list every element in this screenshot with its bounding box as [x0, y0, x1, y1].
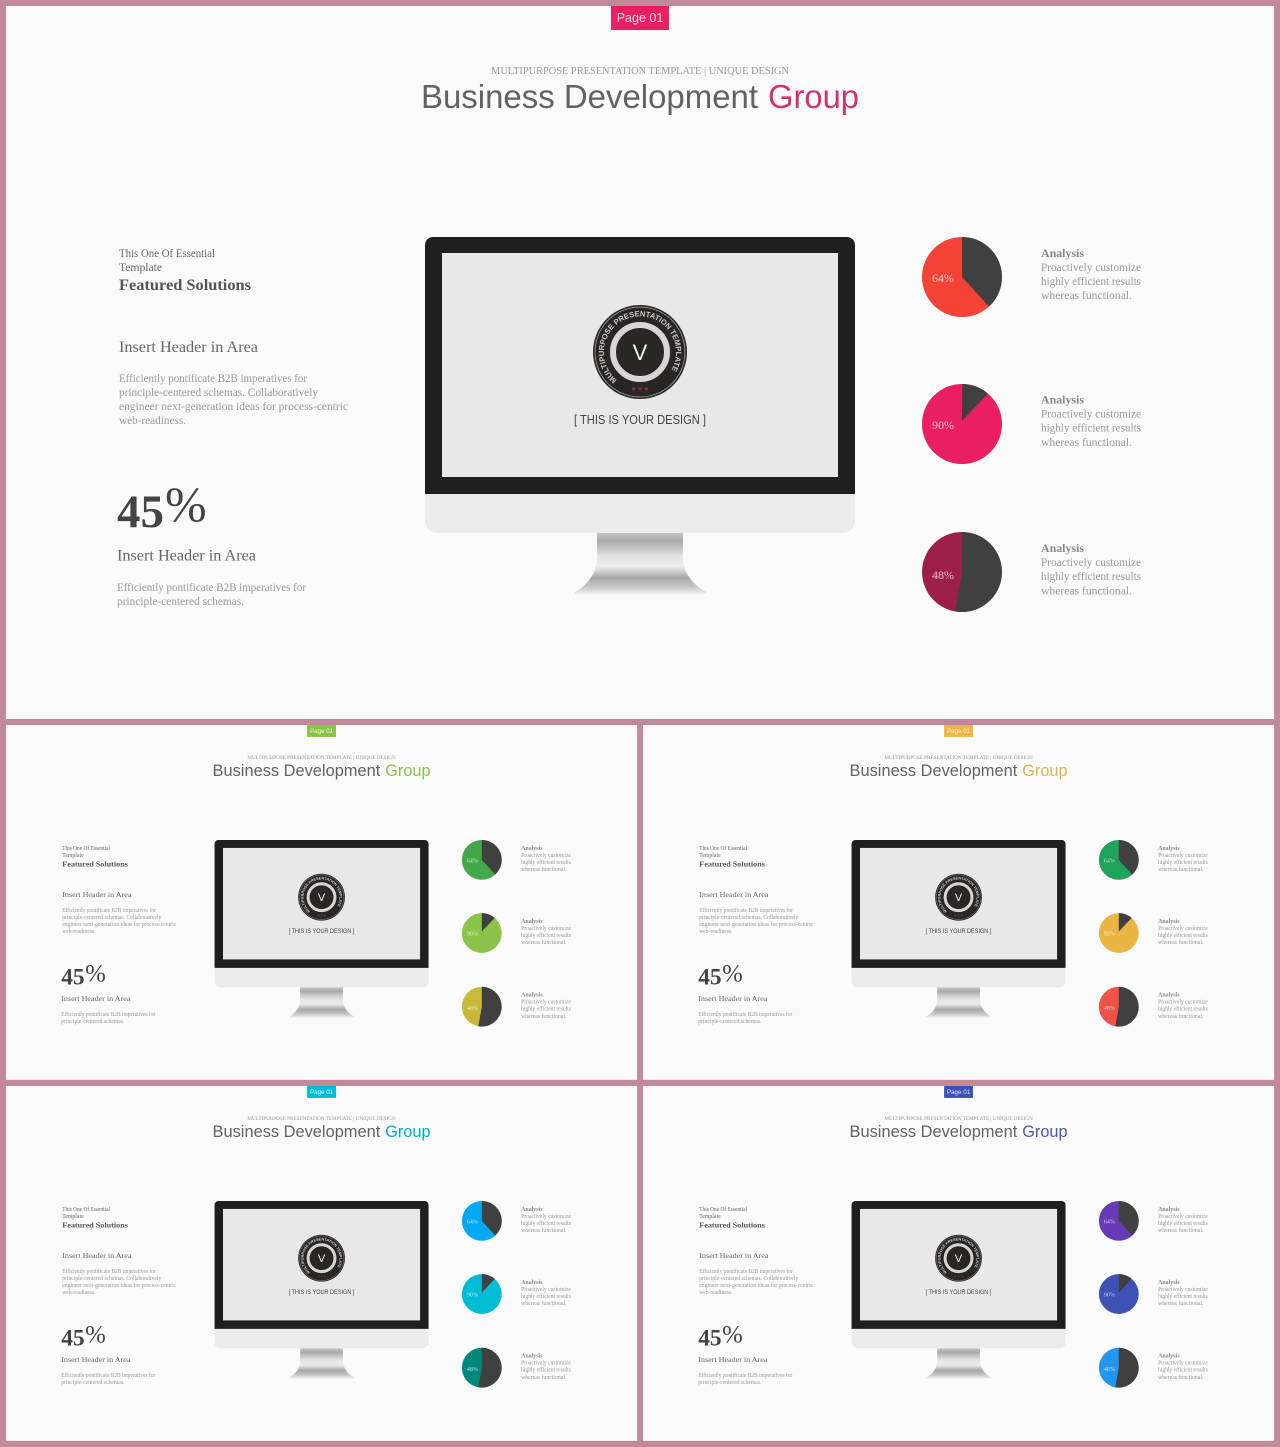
pie: 64% [462, 840, 502, 880]
screen caption: [ THIS IS YOUR DESIGN ] [289, 1289, 355, 1296]
logo badge: MULTIPURPOSE PRESENTATION TEMPLATE [598, 311, 682, 384]
analysis text two [521, 919, 572, 946]
analysis text three: whereas functional. [1041, 584, 1132, 598]
analysis text one: Proactively customize [1041, 261, 1141, 274]
analysis text two: whereas functional. [521, 1300, 567, 1307]
page badge [944, 725, 973, 737]
stat: 45%: % [722, 960, 743, 987]
monitor [214, 840, 429, 1018]
pie: 48% [462, 1348, 502, 1388]
text block: header one [62, 890, 177, 935]
monitor [214, 1201, 429, 1378]
left intro text: Template [62, 1214, 84, 1220]
text block: header one: engineer next-generation ideas for process-centric [119, 400, 348, 413]
stat: 45%: % [165, 476, 207, 532]
logo badge: ★★★ [954, 914, 963, 918]
left intro text [699, 1206, 765, 1229]
text block: header one: Efficiently pontificate B2B imperatives for [62, 907, 156, 914]
pie: 48% [922, 532, 1002, 612]
text block: header one: principle-centered schemas. Collaboratively [699, 915, 798, 921]
analysis text one: highly efficient results [1041, 275, 1141, 288]
text block: header two [698, 994, 792, 1025]
analysis text one: whereas functional. [1158, 1227, 1204, 1234]
pie: 48%: 48% [1104, 1367, 1115, 1373]
left intro text: Featured Solutions [699, 1220, 765, 1229]
text block: header two [61, 994, 155, 1025]
analysis text one: Proactively customize [1158, 853, 1208, 859]
logo badge: V [633, 340, 648, 365]
pie: 48%: 48% [467, 1006, 478, 1012]
analysis text two: Analysis [1158, 919, 1180, 925]
analysis text two [1158, 1280, 1209, 1307]
analysis text three: highly efficient results [1041, 570, 1141, 583]
logo badge: MULTIPURPOSE PRESENTATION TEMPLATE [300, 1238, 342, 1274]
title: Group [1022, 762, 1068, 780]
analysis text one: Proactively customize [521, 1214, 571, 1220]
left intro text [62, 1206, 128, 1229]
logo badge [935, 874, 982, 921]
analysis text three: Proactively customize [521, 1361, 571, 1367]
analysis text two: whereas functional. [1158, 939, 1204, 946]
logo badge: ★★★ [317, 1275, 326, 1279]
pie: 64%: 64% [1104, 858, 1115, 864]
analysis text one [1158, 1207, 1209, 1234]
panel: main slide, pink theme [6, 6, 1274, 719]
stat: 45%: 45 [698, 1325, 722, 1351]
analysis text two: Proactively customize [521, 926, 571, 932]
pie: 48%: 48% [467, 1367, 478, 1373]
stat: 45% [698, 960, 743, 990]
left intro text: This One Of Essential [62, 1206, 110, 1213]
pie: 64% [462, 1201, 502, 1241]
text block: header two [117, 548, 306, 608]
pie: 48% [462, 987, 502, 1027]
analysis text one: highly efficient results [1158, 859, 1209, 866]
analysis text three: highly efficient results [1158, 1367, 1209, 1374]
text block: header one: web-readiness. [62, 1290, 96, 1296]
text block: header one: web-readiness. [62, 929, 96, 935]
title: Business Development [213, 1123, 381, 1141]
page badge: Page 01 [310, 728, 334, 735]
logo badge: V [318, 892, 326, 904]
analysis text three: Analysis [1158, 993, 1180, 999]
analysis text three: Analysis [1041, 542, 1084, 555]
subtitle: MULTIPURPOSE PRESENTATION TEMPLATE | UNIQUE DESIGN [884, 1116, 1033, 1122]
analysis text two: whereas functional. [521, 939, 567, 946]
analysis text two: whereas functional. [1041, 436, 1132, 449]
text block: header one: Efficiently pontificate B2B imperatives for [699, 907, 793, 914]
analysis text two: Proactively customize [1158, 1287, 1208, 1293]
pie: 48% [1099, 987, 1139, 1027]
analysis text two: whereas functional. [1158, 1300, 1204, 1307]
subtitle: MULTIPURPOSE PRESENTATION TEMPLATE | UNIQUE DESIGN [491, 66, 789, 77]
analysis text three: whereas functional. [521, 1013, 567, 1020]
text block: header two: Efficiently pontificate B2B imperatives for [61, 1372, 155, 1379]
text block: header one: web-readiness. [699, 1290, 733, 1296]
analysis text two: Proactively customize [1158, 926, 1208, 932]
monitor [852, 1201, 1066, 1378]
text block: header one: principle-centered schemas. Collaboratively [62, 1276, 161, 1282]
logo badge [298, 874, 345, 921]
analysis text one: Proactively customize [521, 853, 571, 859]
analysis text two: highly efficient results [1158, 932, 1209, 939]
analysis text three: whereas functional. [521, 1374, 567, 1381]
analysis text one: highly efficient results [1158, 1220, 1209, 1227]
text block: header two [698, 1355, 792, 1386]
analysis text one: highly efficient results [521, 859, 572, 866]
panel: small slide, amber theme [643, 725, 1274, 1080]
subtitle: MULTIPURPOSE PRESENTATION TEMPLATE | UNIQUE DESIGN [247, 1116, 396, 1122]
text block: header one: Insert Header in Area [62, 890, 132, 899]
analysis text one: Proactively customize [1158, 1214, 1208, 1220]
text block: header two: principle-centered schemas. [61, 1019, 125, 1025]
page badge [611, 6, 669, 30]
screen caption: [ THIS IS YOUR DESIGN ] [926, 1289, 992, 1296]
text block: header one: engineer next-generation ideas for process-centric [699, 1282, 814, 1289]
analysis text three: Proactively customize [1041, 556, 1141, 569]
analysis text one: Analysis [1158, 1207, 1180, 1213]
text block: header one [699, 890, 814, 935]
text block: header one: engineer next-generation ideas for process-centric [62, 1282, 177, 1289]
analysis text two: highly efficient results [1041, 422, 1141, 434]
left intro text: This One Of Essential [119, 247, 215, 260]
analysis text three [1158, 993, 1209, 1020]
pie: 90%: 90% [1104, 1293, 1115, 1299]
analysis text one: Analysis [1158, 846, 1180, 852]
text block: header one: Insert Header in Area [119, 339, 258, 356]
left intro text [699, 845, 765, 868]
analysis text three [521, 1354, 572, 1381]
left intro text: Featured Solutions [62, 1220, 128, 1229]
pie: 48%: 48% [1104, 1006, 1115, 1012]
analysis text three: Analysis [1158, 1354, 1180, 1360]
panel: small slide, cyan theme [6, 1086, 638, 1441]
text block: header two: Insert Header in Area [698, 994, 768, 1003]
analysis text two: Analysis [521, 919, 543, 925]
analysis text three [1158, 1354, 1209, 1381]
title: Group [768, 78, 859, 115]
text block: header one: Efficiently pontificate B2B imperatives for [119, 372, 307, 385]
logo badge: V [955, 1253, 963, 1265]
pie: 90%: 90% [1104, 932, 1115, 938]
screen caption: [ THIS IS YOUR DESIGN ] [574, 413, 706, 427]
text block: header two: Insert Header in Area [61, 1355, 131, 1364]
analysis text two [1158, 919, 1209, 946]
pie: 90% [462, 1274, 502, 1314]
left intro text: Template [62, 853, 84, 859]
left intro text: Template [699, 853, 721, 859]
left intro text: Featured Solutions [62, 859, 128, 868]
text block: header one: Insert Header in Area [62, 1251, 132, 1260]
analysis text two [1041, 394, 1141, 449]
pie: 64%: 64% [467, 1219, 478, 1225]
logo badge: MULTIPURPOSE PRESENTATION TEMPLATE [938, 1238, 980, 1274]
analysis text three: Proactively customize [1158, 1000, 1208, 1006]
title: Business Development [213, 762, 381, 780]
text block: header one: Insert Header in Area [699, 1251, 769, 1260]
text block: header one [699, 1251, 814, 1296]
page badge: Page 01 [947, 728, 971, 735]
logo badge: V [318, 1253, 326, 1265]
analysis text three [1041, 542, 1141, 598]
stat: 45% [61, 960, 106, 990]
stat: 45%: % [722, 1321, 743, 1348]
text block: header two [61, 1355, 155, 1386]
analysis text one: highly efficient results [521, 1220, 572, 1227]
analysis text three [521, 993, 572, 1020]
pie: 64%: 64% [1104, 1219, 1115, 1225]
left intro text [119, 247, 251, 294]
pie: 90%: 90% [467, 1293, 478, 1299]
analysis text two: Analysis [521, 1280, 543, 1286]
title: Business Development [850, 1123, 1018, 1141]
text block: header two: Efficiently pontificate B2B imperatives for [698, 1011, 792, 1018]
pie: 90% [462, 913, 502, 953]
analysis text two: Analysis [1041, 394, 1084, 406]
logo badge: MULTIPURPOSE PRESENTATION TEMPLATE [300, 876, 342, 913]
panel: small slide, indigo theme [643, 1086, 1274, 1441]
logo badge [935, 1234, 982, 1282]
page badge [307, 1086, 336, 1098]
stat: 45%: 45 [117, 486, 164, 538]
page badge [307, 725, 336, 737]
title: Business Development [850, 762, 1018, 780]
analysis text two: Proactively customize [521, 1287, 571, 1293]
analysis text three: Proactively customize [1158, 1361, 1208, 1367]
monitor [852, 840, 1066, 1018]
logo badge: ★★★ [317, 914, 326, 918]
left intro text: Template [699, 1214, 721, 1220]
stat: 45% [117, 476, 207, 538]
title: Group [1022, 1123, 1068, 1141]
logo badge: ★★★ [631, 385, 649, 393]
text block: header one: Insert Header in Area [699, 890, 769, 899]
pie: 64% [1099, 840, 1139, 880]
analysis text three: whereas functional. [1158, 1013, 1204, 1020]
analysis text two: Proactively customize [1041, 408, 1141, 420]
text block: header one: Efficiently pontificate B2B imperatives for [699, 1268, 793, 1275]
analysis text two [521, 1280, 572, 1307]
text block: header two: Efficiently pontificate B2B imperatives for [698, 1372, 792, 1379]
analysis text one: Analysis [521, 1207, 543, 1213]
screen caption: [ THIS IS YOUR DESIGN ] [926, 928, 992, 935]
analysis text one: whereas functional. [521, 1227, 567, 1234]
analysis text one [1158, 846, 1209, 873]
text block: header two: principle-centered schemas. [698, 1380, 762, 1386]
stat: 45%: % [85, 1321, 106, 1348]
text block: header one [119, 339, 348, 427]
panel: small slide, green theme [6, 725, 638, 1080]
text block: header one: web-readiness. [699, 929, 733, 935]
left intro text: Template [119, 261, 162, 274]
title: Group [385, 1123, 431, 1141]
analysis text three: whereas functional. [1158, 1374, 1204, 1381]
subtitle: MULTIPURPOSE PRESENTATION TEMPLATE | UNIQUE DESIGN [247, 755, 396, 761]
logo badge [298, 1234, 345, 1282]
analysis text one [521, 846, 572, 873]
logo badge: ★★★ [954, 1275, 963, 1279]
text block: header one: engineer next-generation ideas for process-centric [699, 921, 814, 928]
stat: 45%: 45 [61, 1325, 85, 1351]
stat: 45% [698, 1321, 743, 1351]
text block: header one: web-readiness. [119, 414, 186, 427]
text block: header one: engineer next-generation ideas for process-centric [62, 921, 177, 928]
left intro text: This One Of Essential [62, 845, 110, 852]
analysis text three: highly efficient results [1158, 1006, 1209, 1013]
pie: 90% [1099, 913, 1139, 953]
analysis text two: highly efficient results [521, 932, 572, 939]
analysis text one: whereas functional. [1158, 866, 1204, 873]
pie: 64%: 64% [467, 858, 478, 864]
text block: header two: Insert Header in Area [117, 548, 256, 564]
analysis text one: whereas functional. [521, 866, 567, 873]
pie: 90% [1099, 1274, 1139, 1314]
analysis text one: Analysis [521, 846, 543, 852]
analysis text one [521, 1207, 572, 1234]
analysis text one: whereas functional. [1041, 289, 1132, 302]
analysis text three: Proactively customize [521, 1000, 571, 1006]
monitor [425, 237, 855, 594]
analysis text one [1041, 247, 1141, 302]
text block: header two: Efficiently pontificate B2B imperatives for [61, 1011, 155, 1018]
page badge [944, 1086, 973, 1098]
analysis text three: Analysis [521, 993, 543, 999]
text block: header one: principle-centered schemas. Collaboratively [119, 386, 318, 399]
pie: 90%: 90% [467, 932, 478, 938]
text block: header one: principle-centered schemas. Collaboratively [699, 1276, 798, 1282]
analysis text two: highly efficient results [521, 1293, 572, 1300]
left intro text: Featured Solutions [699, 859, 765, 868]
page badge: Page 01 [947, 1089, 971, 1096]
analysis text three: Analysis [521, 1354, 543, 1360]
text block: header two: principle-centered schemas. [698, 1019, 762, 1025]
text block: header two: Efficiently pontificate B2B imperatives for [117, 581, 306, 594]
text block: header one [62, 1251, 177, 1296]
text block: header two: principle-centered schemas. [117, 595, 244, 608]
pie: 48%: 48% [932, 568, 954, 582]
left intro text: Featured Solutions [119, 277, 251, 294]
text block: header one: Efficiently pontificate B2B imperatives for [62, 1268, 156, 1275]
page badge: Page 01 [617, 11, 663, 25]
subtitle: MULTIPURPOSE PRESENTATION TEMPLATE | UNIQUE DESIGN [884, 755, 1033, 761]
analysis text two: highly efficient results [1158, 1293, 1209, 1300]
text block: header two: Insert Header in Area [61, 994, 131, 1003]
analysis text two: Analysis [1158, 1280, 1180, 1286]
analysis text one: Analysis [1041, 247, 1084, 260]
pie: 64% [1099, 1201, 1139, 1241]
text block: header two: Insert Header in Area [698, 1355, 768, 1364]
analysis text three: highly efficient results [521, 1367, 572, 1374]
left intro text: This One Of Essential [699, 845, 747, 852]
pie: 64%: 64% [932, 271, 954, 285]
pie: 90% [922, 384, 1002, 464]
text block: header one: principle-centered schemas. Collaboratively [62, 915, 161, 921]
screen caption: [ THIS IS YOUR DESIGN ] [289, 928, 355, 935]
page badge: Page 01 [310, 1089, 334, 1096]
pie: 64% [922, 237, 1002, 317]
stat: 45% [61, 1321, 106, 1351]
title: Business Development [421, 78, 758, 115]
stat: 45%: 45 [61, 964, 85, 990]
title: Group [385, 762, 431, 780]
left intro text: This One Of Essential [699, 1206, 747, 1213]
pie: 90%: 90% [932, 418, 954, 432]
text block: header two: principle-centered schemas. [61, 1380, 125, 1386]
analysis text three: highly efficient results [521, 1006, 572, 1013]
left intro text [62, 845, 128, 868]
stat: 45%: % [85, 960, 106, 987]
pie: 48% [1099, 1348, 1139, 1388]
logo badge: MULTIPURPOSE PRESENTATION TEMPLATE [938, 876, 980, 913]
logo badge: V [955, 892, 963, 904]
stat: 45%: 45 [698, 964, 722, 990]
